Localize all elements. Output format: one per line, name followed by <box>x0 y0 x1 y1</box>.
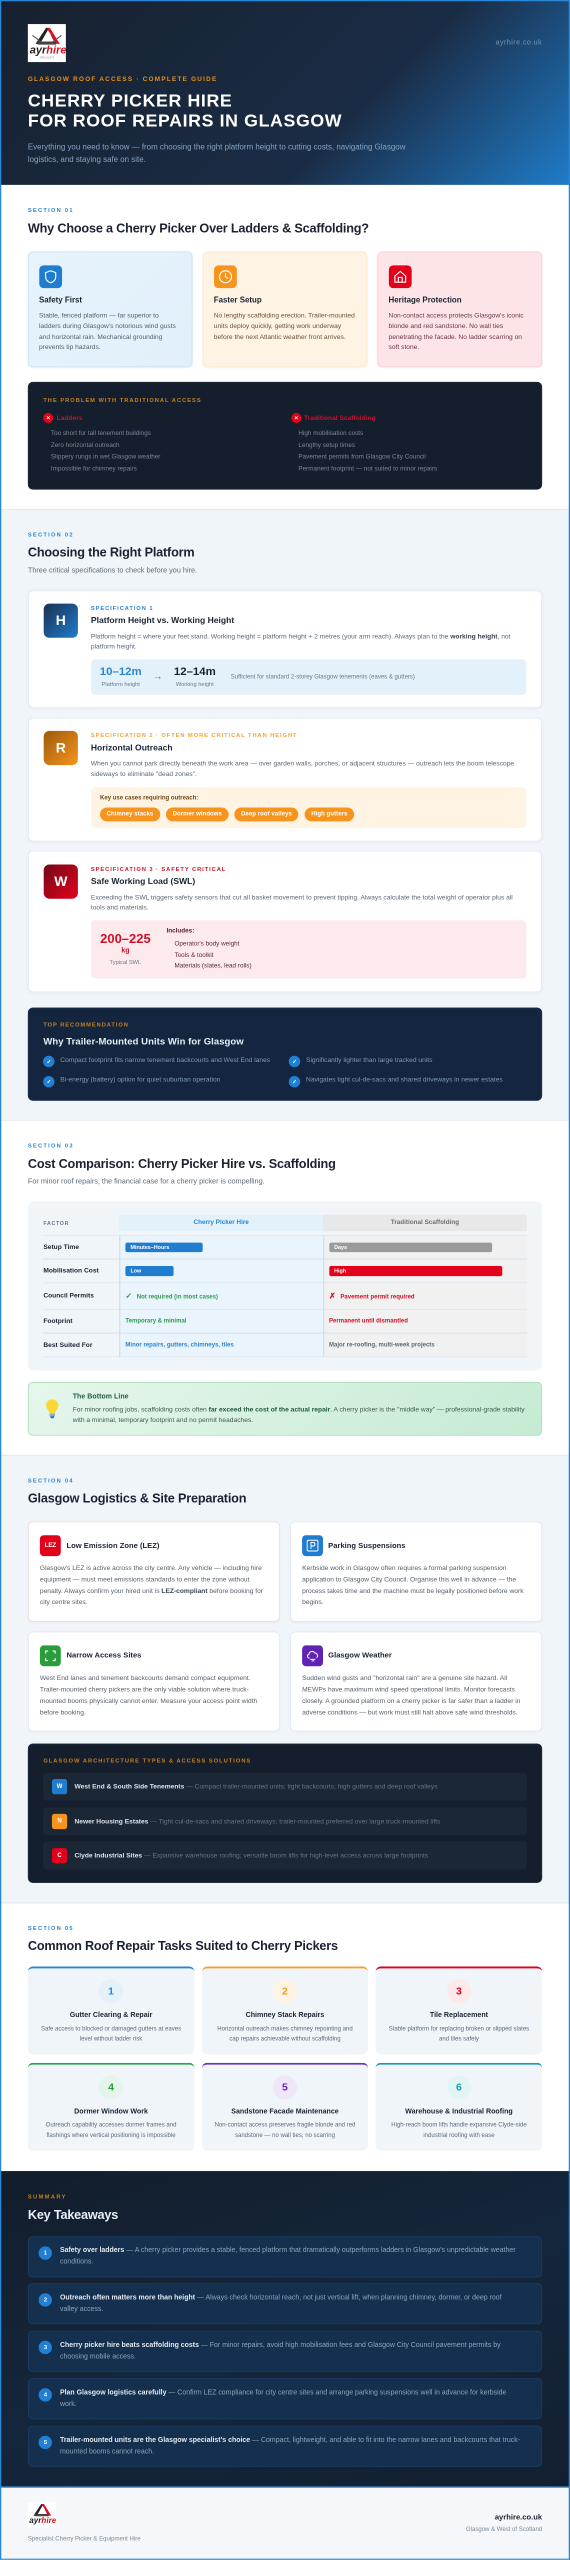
benefit: Bi-energy (battery) option for quiet suburban operation <box>60 1076 220 1084</box>
row text: Clyde Industrial Sites — Expansive warehouse roofing; versatile boom lifts for high-level access across large footprints <box>74 1852 428 1859</box>
check icon <box>289 1056 300 1067</box>
number <box>273 1979 297 2003</box>
spec text: Platform height = where your feet stand. Working height = platform height + 2 metres (your arm reach). Always plan to the working height, not <box>91 633 510 640</box>
icon: ladders cross: ✕ <box>46 415 50 421</box>
section label: SECTION 05 <box>28 1925 74 1931</box>
card text <box>40 1674 257 1716</box>
number <box>447 2075 471 2099</box>
table header: scaffolding: Traditional Scaffolding <box>391 1219 459 1226</box>
icon: scaffolding cross: ✕ <box>294 415 298 421</box>
section 05: common tasks <box>0 1903 570 2171</box>
task text: industrial roofing with ease <box>423 2132 495 2139</box>
number <box>39 2294 52 2307</box>
scaffolding heading: Traditional Scaffolding <box>304 415 376 422</box>
card: parking suspensions <box>290 1521 542 1622</box>
task text: High-reach boom lifts handle expansive Clyde-side <box>391 2122 527 2129</box>
benefit: Significantly lighter than large tracked units <box>306 1056 432 1064</box>
section heading: Why Choose a Cherry Picker Over Ladders & Scaffolding? <box>28 221 369 235</box>
scaffolding list: Permanent footprint — not suited to minor repairs <box>298 465 437 472</box>
card text <box>39 312 176 351</box>
bar: cherry picker setup <box>125 1243 202 1252</box>
callout text: For minor roofing jobs, scaffolding costs often far exceed the cost of the actual repair. A cherry picker is the "middle way" — professional-grade stability <box>73 1406 525 1414</box>
includes list: Tools & toolkit <box>174 952 214 959</box>
task title: Tile Replacement <box>430 2011 488 2019</box>
summary heading: Key Takeaways <box>28 2208 118 2222</box>
card text: Trailer-mounted cherry pickers are the only viable solution where truck- <box>40 1686 249 1694</box>
card: faster setup <box>203 251 367 367</box>
scaffolding list: High mobilisation costs <box>298 430 363 437</box>
task text: Non-contact access preserves fragile blonde and red <box>215 2122 355 2129</box>
task title: Sandstone Facade Maintenance <box>231 2108 339 2115</box>
badge C: C <box>57 1852 62 1859</box>
ladders list: Zero horizontal outreach <box>51 442 120 449</box>
icon: shield <box>39 265 62 288</box>
takeaway text: conditions. <box>60 2258 93 2266</box>
takeaway text <box>60 2436 520 2455</box>
icon: scaffolding cross <box>291 413 301 423</box>
callout text: with a minimal, temporary footprint and no permit headaches. <box>73 1416 253 1424</box>
panel: top recommendation <box>28 1007 542 1101</box>
card: low emission zone <box>28 1521 280 1622</box>
takeaway text: Outreach often matters more than height — Always check horizontal reach, not just vertical lift, when planning chimney, dormer, or deep roof <box>60 2294 502 2302</box>
task card 5 <box>202 2063 368 2151</box>
spec text: Exceeding the SWL triggers safety sensors that cut all basket movement to prevent tipping. Always calculate the total weight of operator plus all <box>91 893 513 901</box>
best for: cherry picker: Minor repairs, gutters, chimneys, tiles <box>125 1341 234 1348</box>
number: 3 <box>44 2344 47 2350</box>
permit: cherry picker: ✓ Not required (in most cases) <box>125 1291 218 1300</box>
panel heading: THE PROBLEM WITH TRADITIONAL ACCESS <box>43 397 202 403</box>
card text: penetrating the facade. No ladder scarring on <box>389 333 522 341</box>
number <box>39 2246 52 2259</box>
table header: cherry picker <box>119 1215 323 1231</box>
number <box>99 1979 123 2003</box>
takeaway text: Cherry picker hire beats scaffolding costs — For minor repairs, avoid high mobilisation fees and Glasgow City Council pavement permits by <box>60 2341 501 2349</box>
section 03: cost comparison <box>0 1120 570 1455</box>
section 04: logistics <box>0 1455 570 1903</box>
badge W: W <box>54 873 67 889</box>
panel: specification 1 <box>28 590 542 708</box>
section label: SECTION 03 <box>28 1143 74 1149</box>
badge W <box>44 864 78 899</box>
load box <box>91 920 526 979</box>
card text: mounted booms physically cannot enter. Measure your access point width <box>40 1697 257 1705</box>
task text: and tiles safely <box>439 2036 479 2043</box>
takeaway text <box>60 2341 501 2360</box>
spec title: Safe Working Load (SWL) <box>91 877 195 886</box>
footer tagline: Specialist Cherry Picker & Equipment Hire <box>28 2535 141 2542</box>
scaffolding list: Pavement permits from Glasgow City Council <box>298 454 426 461</box>
task text: Outreach capability accesses dormer frames and <box>46 2122 176 2129</box>
section label: SECTION 04 <box>28 1478 74 1484</box>
card title: Low Emission Zone (LEZ) <box>66 1541 159 1550</box>
site url: ayrhire.co.uk <box>496 39 542 46</box>
takeaway text: mounted booms cannot reach. <box>60 2448 154 2455</box>
check icon: ✓ <box>292 1079 297 1085</box>
chip <box>166 807 229 821</box>
panel: architecture types <box>28 1743 542 1883</box>
section label: SECTION 02 <box>28 532 74 538</box>
number <box>39 2436 52 2449</box>
number: 4 <box>44 2392 47 2398</box>
use cases heading: Key use cases requiring outreach: <box>100 794 198 801</box>
icon: house <box>389 265 411 288</box>
task text <box>41 2026 181 2043</box>
card text: prevents tip hazards. <box>39 344 101 351</box>
ladders list: Too short for tall tenement buildings <box>51 430 151 437</box>
footer logo: ayrhire <box>29 2516 56 2525</box>
number: 1 <box>44 2249 47 2256</box>
best for: scaffolding: Major re-roofing, multi-week projects <box>329 1341 435 1348</box>
benefit: Navigates tight cul-de-sacs and shared driveways in newer estates <box>306 1076 503 1084</box>
task text <box>46 2122 176 2139</box>
number <box>447 1979 471 2003</box>
hero header <box>0 0 570 185</box>
spec label: SPECIFICATION 3 · SAFETY CRITICAL <box>91 866 226 872</box>
spec text <box>91 893 513 911</box>
section 02: choosing the platform <box>0 509 570 1120</box>
arrow: → <box>153 671 163 682</box>
task title: Warehouse & Industrial Roofing <box>405 2108 513 2115</box>
number: 1 <box>108 1985 114 1997</box>
load caption: Typical SWL <box>110 959 141 965</box>
ladders heading: Ladders <box>57 415 83 422</box>
task card 2 <box>202 1967 368 2055</box>
card text: begins. <box>302 1599 324 1606</box>
check icon: ✓ <box>47 1059 51 1065</box>
footer logo <box>28 2502 56 2528</box>
row label: Footprint <box>43 1317 72 1325</box>
number: 3 <box>456 1985 462 1997</box>
title: FOR ROOF REPAIRS IN GLASGOW <box>28 111 342 131</box>
callout text <box>72 1406 525 1424</box>
chip: Dormer windows <box>173 810 222 817</box>
use cases box <box>91 787 526 828</box>
number <box>273 2075 297 2099</box>
badge C <box>52 1848 67 1863</box>
title <box>28 91 342 131</box>
number <box>39 2341 52 2354</box>
badge R: R <box>56 740 66 755</box>
bar: scaffolding setup: Days <box>334 1244 347 1250</box>
bar: scaffolding cost <box>329 1266 502 1276</box>
permit: scaffolding: ✗ Pavement permit required <box>329 1291 415 1300</box>
stat note: Sufficient for standard 2-storey Glasgow tenements (eaves & gutters) <box>231 673 415 680</box>
callout heading: The Bottom Line <box>73 1393 129 1400</box>
chip <box>100 807 160 821</box>
bar: scaffolding cost: High <box>334 1268 346 1274</box>
card text: Kerbside work in Glasgow often requires a formal parking suspension <box>302 1564 507 1572</box>
spec text: sideways to eliminate "dead zones". <box>91 770 197 778</box>
card: glasgow weather <box>290 1632 542 1731</box>
card text: Non-contact access protects Glasgow's iconic <box>389 312 524 319</box>
badge R <box>44 731 78 765</box>
card: heritage protection <box>377 251 542 367</box>
bar: cherry picker cost <box>125 1266 173 1276</box>
footer region: Glasgow & West of Scotland <box>466 2526 542 2533</box>
includes heading: Includes: <box>166 927 194 934</box>
task text: Horizontal outreach makes chimney repointing and <box>217 2026 353 2033</box>
takeaway 4 <box>28 2378 542 2419</box>
task text: sandstone — no wall ties, no scarring <box>235 2132 335 2139</box>
panel label: TOP RECOMMENDATION <box>43 1022 129 1028</box>
icon: parking <box>302 1535 323 1556</box>
icon: frame corners <box>40 1645 61 1666</box>
task title: Dormer Window Work <box>74 2108 148 2115</box>
badge N <box>52 1814 67 1829</box>
card text: Stable, fenced platform — far superior to <box>39 312 159 319</box>
section heading: Glasgow Logistics & Site Preparation <box>28 1492 246 1506</box>
number: 6 <box>456 2082 462 2093</box>
card text: equipment — must meet emissions standards to enter the zone without <box>40 1576 249 1583</box>
badge W: W <box>57 1783 62 1790</box>
task text <box>217 2026 353 2043</box>
card: safety first <box>28 251 193 367</box>
card text: penalty. Always confirm your hired unit is LEZ-compliant before booking for <box>40 1587 263 1595</box>
load value: 200–225 <box>100 931 151 946</box>
icon: LEZ: LEZ <box>45 1542 56 1549</box>
panel: specification 3 <box>28 851 542 992</box>
icon: ladders cross <box>43 413 53 423</box>
card text <box>214 312 355 341</box>
subtitle: Everything you need to know — from choosing the right platform height to cutting costs, navigating Glasgow <box>28 143 405 151</box>
row: housing estates <box>43 1807 527 1836</box>
ladders list: Impossible for chimney repairs <box>51 465 137 472</box>
platform height caption: Platform height <box>102 681 140 687</box>
scaffolding list: Lengthy setup times <box>298 442 355 449</box>
check icon <box>289 1076 300 1087</box>
platform height value: 10–12m <box>100 665 142 678</box>
footer url: ayrhire.co.uk <box>495 2512 542 2521</box>
row: industrial sites <box>43 1841 527 1870</box>
title: CHERRY PICKER HIRE <box>28 91 232 110</box>
takeaway text: Safety over ladders — A cherry picker provides a stable, fenced platform that dramatically outperforms ladders in Glasgow's unpredictable weather <box>60 2247 516 2254</box>
section heading: Choosing the Right Platform <box>28 546 194 560</box>
spec text: platform height. <box>91 643 137 651</box>
takeaway 3 <box>28 2331 542 2372</box>
card title: Parking Suspensions <box>328 1541 405 1550</box>
spec label: SPECIFICATION 1 <box>91 605 153 611</box>
footprint: scaffolding: Permanent until dismantled <box>329 1317 408 1324</box>
subtitle: logistics, and staying safe on site. <box>28 155 146 164</box>
card text: No lengthy scaffolding erection. Trailer-mounted <box>214 312 355 319</box>
number <box>39 2388 52 2402</box>
ladders list: Slippery rungs in wet Glasgow weather <box>51 454 160 461</box>
chip <box>305 807 354 821</box>
number: 4 <box>108 2082 114 2093</box>
task text: Stable platform for replacing broken or slipped slates <box>389 2026 529 2033</box>
card text: West End lanes and tenement backcourts demand compact equipment. <box>40 1674 250 1682</box>
icon: cloud <box>302 1645 323 1666</box>
card text: ladders during Glasgow's notorious wind gusts <box>39 322 176 330</box>
summary label: SUMMARY <box>28 2193 67 2200</box>
card text: blonde and red sandstone. No wall ties <box>389 322 503 330</box>
table header: cherry picker: Cherry Picker Hire <box>194 1219 249 1226</box>
card text: city centre sites. <box>40 1599 88 1606</box>
card text <box>302 1564 524 1606</box>
card text: before booking. <box>40 1709 86 1716</box>
card text <box>388 312 524 351</box>
ladders list <box>51 430 160 472</box>
card title: Glasgow Weather <box>328 1651 392 1659</box>
check icon <box>43 1076 55 1087</box>
card text: units deploy quickly, getting work underway <box>214 322 341 330</box>
row label: Mobilisation Cost <box>43 1267 99 1275</box>
card text: Glasgow's LEZ is active across the city centre. Any vehicle — including hire <box>40 1564 262 1572</box>
card text: process takes time and the machine must be legally positioned before work <box>302 1587 524 1595</box>
number: 2 <box>282 1985 288 1997</box>
callout: the bottom line <box>28 1382 542 1436</box>
spec text <box>91 633 510 651</box>
spec label: SPECIFICATION 2 · OFTEN MORE CRITICAL THAN HEIGHT <box>91 732 297 738</box>
card text: adverse conditions — but work must still halt above safe wind thresholds. <box>302 1709 518 1716</box>
working height caption: Working height <box>176 681 214 687</box>
chip: High gutters <box>311 810 347 817</box>
task title: Gutter Clearing & Repair <box>70 2011 152 2019</box>
logo: SPECIALISTS <box>40 57 55 60</box>
card title: Safety First <box>39 296 82 305</box>
chip: Deep roof valleys <box>241 810 292 817</box>
row label: Setup Time <box>43 1243 79 1251</box>
takeaway text: Trailer-mounted units are the Glasgow specialist's choice — Compact, lightweight, and able to fit into the narrow lanes and backcourts that truck- <box>60 2436 520 2444</box>
table header: factor: FACTOR <box>43 1220 69 1226</box>
takeaway text <box>60 2294 502 2313</box>
spec text: When you cannot park directly beneath the work area — over garden walls, porches, or adjacent structures — outreach lets the boom telescope <box>91 760 514 768</box>
takeaway text: work. <box>60 2400 77 2408</box>
check icon <box>43 1056 55 1067</box>
card text: and horizontal rain. Mechanical grounding <box>39 333 162 341</box>
task text: flashings where vertical positioning is impossible <box>46 2132 176 2139</box>
task card 3 <box>376 1967 542 2055</box>
section heading: Cost Comparison: Cherry Picker Hire vs. Scaffolding <box>28 1157 336 1171</box>
takeaway text: choosing mobile access. <box>60 2353 136 2360</box>
task card 6 <box>376 2063 542 2151</box>
row text: West End & South Side Tenements — Compact trailer-mounted units; tight backcourts; high gutters and deep roof valleys <box>74 1783 438 1791</box>
chip: Chimney stacks <box>107 810 153 817</box>
section heading: Common Roof Repair Tasks Suited to Cherry Pickers <box>28 1939 338 1953</box>
benefit: Compact footprint fits narrow tenement backcourts and West End lanes <box>60 1056 270 1064</box>
chip <box>235 807 298 821</box>
includes list <box>174 941 252 970</box>
card text: application to Glasgow City Council. Organise this well in advance — the <box>302 1576 516 1583</box>
card text: soft stone. <box>389 344 419 351</box>
spec text <box>90 760 514 778</box>
card title: Heritage Protection <box>389 296 462 305</box>
footprint: cherry picker: Temporary & minimal <box>125 1317 186 1324</box>
table header: scaffolding <box>323 1215 527 1231</box>
card text <box>302 1674 520 1716</box>
card title: Narrow Access Sites <box>66 1651 141 1659</box>
task title: Chimney Stack Repairs <box>246 2011 324 2019</box>
spec title: Platform Height vs. Working Height <box>91 616 234 625</box>
card text <box>40 1564 263 1606</box>
logo <box>28 24 66 62</box>
takeaway 5 <box>28 2426 542 2467</box>
takeaway text <box>60 2246 516 2266</box>
spec title: Horizontal Outreach <box>91 743 173 752</box>
section 01: why choose <box>0 185 570 509</box>
load unit: kg <box>121 947 129 954</box>
takeaway text: Plan Glasgow logistics carefully — Confirm LEZ compliance for city centre sites and arrange parking suspensions well in advance for kerbside <box>60 2389 506 2396</box>
includes list: Materials (slates, lead rolls) <box>174 963 252 970</box>
eyebrow: GLASGOW ROOF ACCESS · COMPLETE GUIDE <box>28 76 218 83</box>
comparison table <box>28 1201 542 1370</box>
scaffolding list <box>298 430 437 472</box>
task text: level without ladder risk <box>80 2036 142 2043</box>
row label: Council Permits <box>43 1292 94 1300</box>
takeaway text: valley access. <box>60 2305 103 2313</box>
section label: SECTION 01 <box>28 207 74 213</box>
card text: before the next Atlantic weather front arrives. <box>214 333 346 341</box>
takeaway 2 <box>28 2283 542 2325</box>
badge W <box>52 1779 67 1794</box>
row text: Newer Housing Estates — Tight cul-de-sacs and shared driveways; trailer-mounted preferred over large truck-mounted lifts <box>74 1818 440 1825</box>
task text <box>391 2122 527 2139</box>
task text <box>215 2122 355 2139</box>
card text: Sudden wind gusts and "horizontal rain" are a genuine site hazard. All <box>302 1674 507 1682</box>
takeaway 1 <box>28 2236 542 2277</box>
summary: key takeaways <box>0 2171 570 2486</box>
task card 1 <box>28 1967 194 2055</box>
card text: MEWPs have maximum wind speed operational limits. Monitor forecasts <box>302 1686 515 1694</box>
bar: cherry picker cost: Low <box>130 1268 141 1274</box>
working height value: 12–14m <box>174 665 216 678</box>
badge H: H <box>56 612 66 628</box>
task text: cap repairs achievable without scaffolding <box>229 2036 341 2043</box>
number: 2 <box>44 2297 47 2303</box>
number: 5 <box>282 2082 288 2093</box>
bar: scaffolding setup <box>329 1243 492 1252</box>
logo: ayrhire <box>30 45 66 57</box>
task text <box>389 2026 529 2043</box>
check icon: ✓ <box>47 1079 51 1085</box>
height stat strip <box>91 659 526 695</box>
check icon: ✓ <box>292 1059 297 1065</box>
panel: specification 2 <box>28 718 542 842</box>
takeaway text <box>60 2389 506 2408</box>
number <box>99 2075 123 2099</box>
panel: problem with traditional access <box>28 382 542 490</box>
panel heading: GLASGOW ARCHITECTURE TYPES & ACCESS SOLUTIONS <box>43 1758 251 1764</box>
icon: LEZ <box>40 1535 61 1556</box>
section intro: For minor roof repairs, the financial case for a cherry picker is compelling. <box>28 1178 265 1186</box>
card text: closely. A grounded platform on a cherry picker is far safer than a ladder in <box>302 1697 520 1705</box>
bar: cherry picker setup: Minutes–Hours <box>130 1244 169 1250</box>
section intro: Three critical specifications to check before you hire. <box>28 567 197 574</box>
footer <box>0 2486 570 2560</box>
badge N: N <box>57 1818 62 1825</box>
row: tenements <box>43 1773 527 1801</box>
card: narrow access <box>28 1632 280 1731</box>
badge H <box>44 603 78 638</box>
includes list: Operator's body weight <box>174 941 239 948</box>
subtitle <box>28 143 406 164</box>
row label: Best Suited For <box>43 1341 92 1349</box>
panel title: Why Trailer-Mounted Units Win for Glasgow <box>43 1036 244 1047</box>
task text: Safe access to blocked or damaged gutters at eaves <box>41 2026 181 2033</box>
card title: Faster Setup <box>214 296 262 305</box>
task card 4 <box>28 2063 194 2151</box>
spec text: tools and materials. <box>91 904 149 911</box>
icon: light bulb <box>46 1399 58 1418</box>
number: 5 <box>44 2439 47 2445</box>
icon: clock <box>214 265 237 288</box>
